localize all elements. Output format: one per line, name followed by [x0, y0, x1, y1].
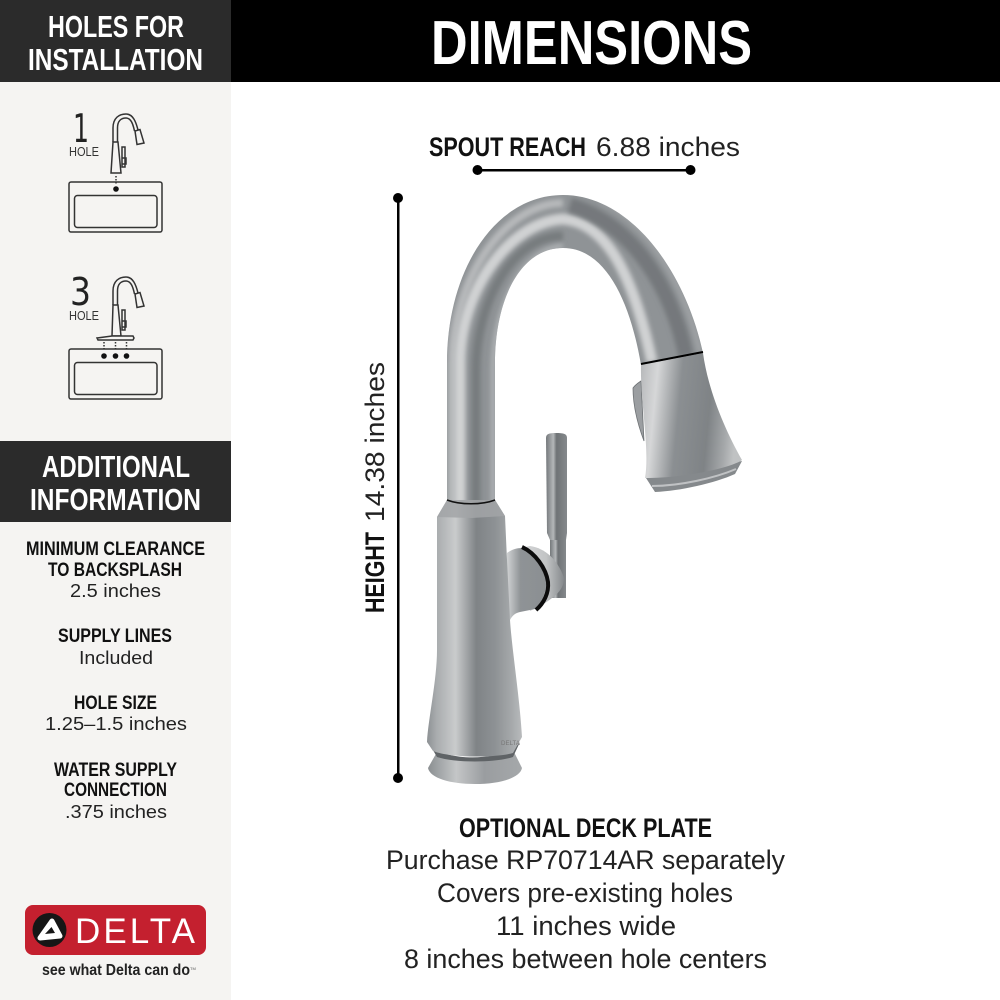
icon: three hole installation: [69, 270, 162, 399]
header: additional information: INFORMATION: [30, 482, 201, 517]
text block: water supply connection: .375 inches: [65, 802, 167, 822]
text block: water supply connection: [54, 760, 177, 822]
faucet lever handle: [507, 433, 567, 620]
header: additional information: ADDITIONAL: [42, 449, 190, 484]
optional deck plate text: [386, 813, 785, 974]
faucet base body: DELTA: [501, 740, 521, 747]
faucet spray head: [633, 352, 742, 492]
icon: one hole installation: HOLE: [69, 144, 99, 159]
text block: minimum clearance: [26, 539, 205, 601]
text block: supply lines: [58, 626, 172, 668]
text block: water supply connection: WATER SUPPLY: [54, 760, 177, 781]
faucet image: [427, 190, 742, 784]
optional deck plate text: 11 inches wide: [496, 911, 676, 941]
sidebar background: [0, 0, 231, 1000]
arrow: height dimension line: [393, 193, 403, 783]
logo: delta: DELTA: [75, 912, 196, 951]
text block: minimum clearance: 2.5 inches: [70, 581, 161, 601]
text block: minimum clearance: TO BACKSPLASH: [48, 560, 182, 581]
faucet base body: [427, 500, 522, 784]
header: holes for installation: INSTALLATION: [28, 42, 203, 77]
logo: delta: see what Delta can do: [42, 962, 190, 979]
optional deck plate text: 8 inches between hole centers: [404, 944, 767, 974]
icon: three hole installation: HOLE: [69, 308, 99, 323]
spout reach label: [429, 132, 740, 162]
text block: hole size: [45, 693, 187, 734]
faucet spout: [440, 190, 710, 510]
optional deck plate text: Purchase RP70714AR separately: [386, 845, 785, 875]
optional deck plate text: Covers pre-existing holes: [437, 878, 733, 908]
text block: hole size: HOLE SIZE: [74, 693, 157, 714]
header: holes for installation: [0, 0, 231, 82]
logo: delta: [25, 905, 206, 979]
spout reach label: 6.88 inches: [596, 132, 740, 162]
icon: three hole installation: 3: [70, 270, 91, 314]
icon: one hole installation: 1: [73, 107, 89, 152]
optional deck plate text: OPTIONAL DECK PLATE: [459, 813, 712, 843]
text block: supply lines: Included: [79, 648, 153, 668]
spout reach label: SPOUT REACH: [429, 132, 586, 162]
height label: HEIGHT: [360, 532, 390, 613]
height label: [360, 362, 390, 613]
text block: minimum clearance: MINIMUM CLEARANCE: [26, 539, 205, 560]
height label: 14.38 inches: [360, 362, 390, 522]
header: holes for installation: HOLES FOR: [48, 9, 184, 44]
text block: water supply connection: CONNECTION: [64, 780, 167, 801]
header: dimensions: DIMENSIONS: [431, 9, 752, 78]
header: dimensions: [231, 0, 1000, 82]
text block: supply lines: SUPPLY LINES: [58, 626, 172, 647]
icon: one hole installation: [69, 107, 162, 232]
logo: delta: TM: [190, 966, 196, 971]
header: additional information: [0, 441, 231, 522]
text block: hole size: 1.25–1.5 inches: [45, 714, 187, 734]
arrow: spout reach dimension line: [472, 165, 696, 175]
